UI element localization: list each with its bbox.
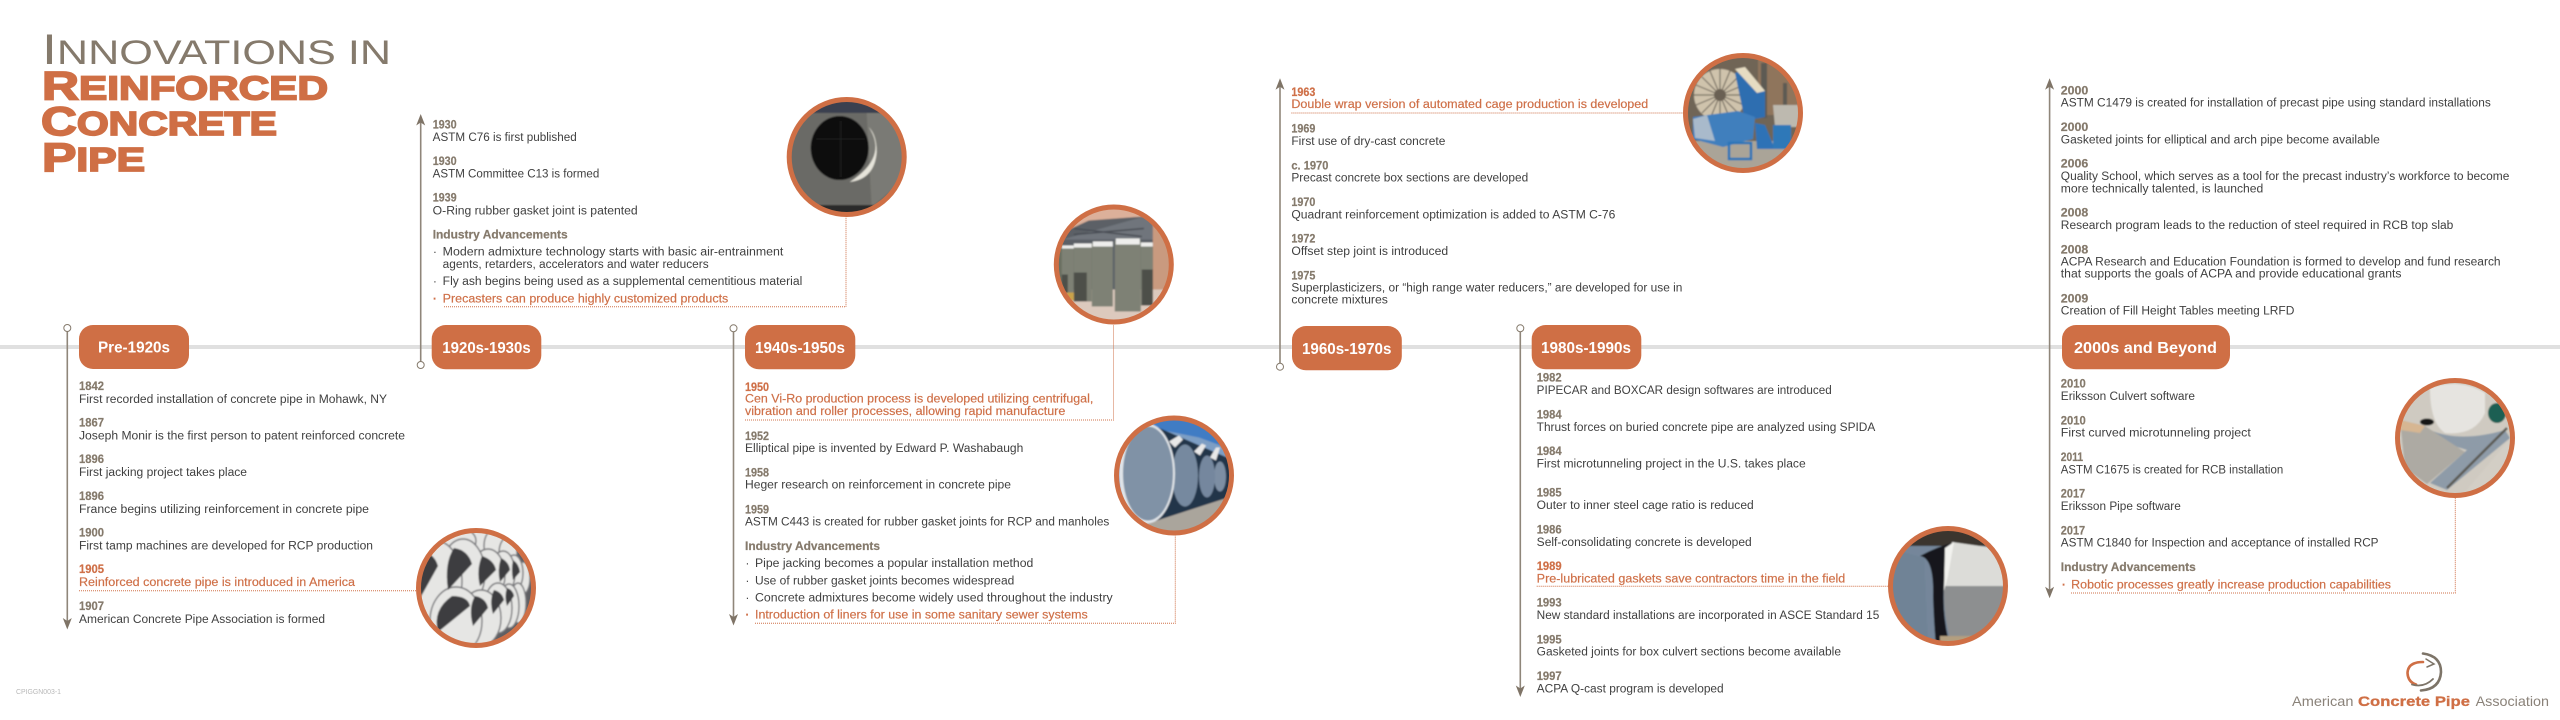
event 1984 SPIDA: Thrust forces on buried concrete pipe are analyzed using SPIDA [1537,422,1876,434]
event 1993 [1537,598,1879,622]
event 2009 [2061,293,2294,317]
arrow: Pre-1920s timeline [63,324,72,630]
event 2017 software [2061,489,2181,513]
event 1952: 1952 [745,431,769,443]
event 1930 C76 [433,120,577,144]
connector to photo [1291,112,1683,114]
event 1984 SPIDA [1537,410,1876,434]
industry advancements 2000s: Industry Advancements [2061,560,2196,574]
industry advancements 2000s [2061,560,2391,591]
event 1939: 1939 [433,193,457,205]
industry advancements 1940s-1950s: · [746,558,749,570]
industry advancements 1920s-1930s: Precasters can produce highly customized products [443,293,729,305]
event 2000 gasketed joints [2061,122,2380,146]
event 2010 curved microtunneling: First curved microtunneling project [2061,428,2252,440]
highlighted event 1950: 1950 [745,382,769,394]
event 1997: 1997 [1537,671,1562,683]
title [41,26,391,180]
event 1997: ACPA Q-cast program is developed [1537,683,1724,695]
connector to photo [745,324,1114,420]
connector to photo [755,535,1175,623]
event 1972: Offset step joint is introduced [1291,246,1448,258]
event 1984 microtunneling: First microtunneling project in the U.S. takes place [1537,458,1806,470]
event 2010 curved microtunneling: 2010 [2061,415,2086,427]
industry advancements 1940s-1950s: Industry Advancements [745,539,880,553]
highlighted event 1963: 1963 [1291,87,1315,99]
connector to photo [2071,498,2455,593]
panel: 1980s-1990s [1516,325,2008,697]
industry advancements 1920s-1930s: Modern admixture technology starts with basic air-entrainment [443,247,784,259]
event 1896 France: France begins utilizing reinforcement in concrete pipe [79,504,369,516]
arrow: 1920s-1930s timeline [416,114,425,368]
event 2000 C1479 [2061,85,2491,110]
event 1939: O-Ring rubber gasket joint is patented [433,205,638,217]
event 2010 Culvert: 2010 [2061,379,2086,391]
panel: 1940s-1950s [729,204,1234,626]
industry advancements 1940s-1950s: Concrete admixtures become widely used throughout the industry [755,593,1113,605]
arrow: 1940s-1950s timeline [729,325,738,626]
event 1993: New standard installations are incorporated in ASCE Standard 15 [1537,610,1879,622]
highlighted event 1989 [1537,561,1845,585]
panel: 1960s-1970s [1276,53,1803,370]
event c. 1970: Precast concrete box sections are developed [1291,173,1528,185]
event 1959: 1959 [745,504,769,516]
logo: American Concrete Pipe Association [2292,654,2549,709]
event 2006: 2006 [2061,159,2088,171]
emblem [2408,654,2441,690]
photo: automated cage machine [1683,53,1803,173]
event 2010 curved microtunneling [2061,415,2252,440]
event 1982 [1537,373,1832,397]
industry advancements 1920s-1930s: agents, retarders, accelerators and water reducers [443,259,709,271]
event 1986: Self-consolidating concrete is developed [1537,537,1752,549]
arrow: 2000s and Beyond timeline [2045,78,2054,598]
event 1930 C76: ASTM C76 is first published [433,132,577,144]
event 1896 jacking: 1896 [79,454,104,466]
event 1930 C76: 1930 [433,120,457,132]
era label: 1940s-1950s [745,325,855,369]
event 1896 France: 1896 [79,491,104,503]
panel: Pre-1920s [63,324,536,655]
title: CONCRETE [41,100,277,144]
event 2017 software: Eriksson Pipe software [2061,501,2181,513]
event 1969: 1969 [1291,124,1315,136]
event 1986 [1537,524,1752,549]
event 1995 [1537,634,1841,659]
event 2009: 2009 [2061,293,2088,305]
event 1867 [79,418,405,442]
event 1896 jacking [79,454,247,479]
event 2017 software: 2017 [2061,489,2085,501]
era label: 1920s-1930s: 1920s-1930s [442,340,531,357]
event 1985: Outer to inner steel cage ratio is reduced [1537,500,1754,512]
highlighted event 1950 [745,382,1093,418]
arrow: 1960s-1970s timeline [1276,78,1284,370]
industry advancements 2000s: Robotic processes greatly increase production capabilities [2071,579,2391,591]
era label: 1960s-1970s [1292,326,1402,370]
event 2010 Culvert [2061,379,2195,403]
title: PIPE [42,136,145,180]
industry advancements 1940s-1950s [745,539,1113,622]
highlighted event 1963 [1291,87,1648,111]
event 1985: 1985 [1537,488,1562,500]
industry advancements 1920s-1930s: · [433,276,437,288]
event 1970 [1291,197,1615,221]
event 2008 research program: 2008 [2061,208,2089,220]
highlighted event 1950: vibration and roller processes, allowing rapid manufacture [745,406,1065,418]
event 1959 [745,504,1110,528]
industry advancements 2000s: · [2062,579,2066,591]
title: INNOVATIONS IN [42,26,391,74]
event 1970: 1970 [1291,197,1315,209]
event 1975 [1291,270,1682,307]
era label: Pre-1920s: Pre-1920s [98,340,170,357]
title: REINFORCED [42,64,328,108]
panel: 2000s and Beyond [2045,78,2515,598]
event 1970: Quadrant reinforcement optimization is added to ASTM C-76 [1291,209,1615,221]
highlighted event 1963: Double wrap version of automated cage production is developed [1291,99,1648,111]
event 1958: Heger research on reinforcement in concrete pipe [745,480,1011,492]
connector to photo [1537,585,1888,587]
era label: 1980s-1990s [1532,325,1641,369]
event 2008 foundation: ACPA Research and Education Foundation is formed to develop and fund research [2061,257,2501,269]
document code: CPIGGN003-1 [16,689,61,696]
event 2017 C1840: ASTM C1840 for Inspection and acceptance of installed RCP [2061,538,2379,550]
highlighted event 1905 [79,564,356,589]
era label: Pre-1920s [79,325,189,369]
event 1867: Joseph Monir is the first person to patent reinforced concrete [79,430,405,442]
event 2008 research program: Research program leads to the reduction of steel required in RCB top slab [2061,220,2453,232]
era label: 1980s-1990s: 1980s-1990s [1541,340,1631,357]
industry advancements 1940s-1950s: · [746,610,749,622]
event 1896 France [79,491,369,516]
event 1995: 1995 [1537,634,1562,646]
industry advancements 1920s-1930s: · [433,247,437,259]
event 1958: 1958 [745,468,770,480]
era label: 1940s-1950s: 1940s-1950s [755,340,845,357]
era label: 2000s and Beyond: 2000s and Beyond [2074,340,2217,357]
industry advancements 1920s-1930s: Fly ash begins being used as a supplemental cementitious material [443,276,802,288]
event 2008 research program [2061,208,2453,232]
industry advancements 1940s-1950s: Introduction of liners for use in some sanitary sewer systems [755,610,1088,622]
event 1930 C13 [433,156,599,181]
event 2011: ASTM C1675 is created for RCB installation [2061,464,2283,476]
event 1842: First recorded installation of concrete pipe in Mohawk, NY [79,394,387,406]
event 1939 [433,193,638,217]
panel: 1920s-1930s [416,97,907,369]
connector to photo [79,590,416,592]
event 1867: 1867 [79,418,104,430]
event 1997 [1537,671,1724,695]
highlighted event 1950: Cen Vi-Ro production process is developed utilizing centrifugal, [745,394,1093,406]
photo: large lined pipes [1114,416,1234,536]
event 1958 [745,468,1011,492]
event 1900: 1900 [79,528,104,540]
industry advancements 1940s-1950s: · [746,575,749,587]
wordmark: American [2292,693,2354,709]
industry advancements 1940s-1950s: Use of rubber gasket joints becomes widespread [755,575,1014,587]
event 2008 foundation: 2008 [2061,244,2089,256]
event 1984 microtunneling [1537,446,1806,470]
event 1972 [1291,234,1448,258]
era label: 2000s and Beyond [2062,325,2230,369]
photo: precast junction structure [2395,378,2515,498]
wordmark: Association [2476,693,2549,709]
event 1982: PIPECAR and BOXCAR design softwares are introduced [1537,385,1832,397]
arrow: 1980s-1990s timeline [1516,325,1525,697]
highlighted event 1989: Pre-lubricated gaskets save contractors time in the field [1537,573,1845,585]
era label: 1960s-1970s: 1960s-1970s [1302,341,1391,358]
event 2006: more technically talented, is launched [2061,183,2263,195]
event 1907: 1907 [79,601,104,613]
event 1896 jacking: First jacking project takes place [79,467,247,479]
era label: 1920s-1930s [432,325,541,369]
event 2017 C1840: 2017 [2061,525,2085,537]
event 1975: 1975 [1291,270,1316,282]
event 2011: 2011 [2061,452,2084,464]
event 2000 C1479: 2000 [2061,85,2088,97]
event 1959: ASTM C443 is created for rubber gasket joints for RCP and manholes [745,516,1110,528]
event 2006 [2061,159,2509,195]
photo: stacked white pipes [416,528,536,648]
event 2017 C1840 [2061,525,2379,550]
photo: pipe with pre-lubricated gasket [1888,526,2008,646]
event 1975: Superplasticizers, or “high range water reducers,” are developed for use in [1291,283,1682,295]
photo: pipe section with round opening [787,97,907,217]
event 2000 C1479: ASTM C1479 is created for installation of precast pipe using standard installations [2061,98,2491,110]
event 1842: 1842 [79,381,104,393]
industry advancements 1940s-1950s: Pipe jacking becomes a popular installation method [755,558,1033,570]
event 1952 [745,431,1023,455]
industry advancements 1940s-1950s: · [746,593,749,605]
event 1907 [79,601,325,626]
event 1952: Elliptical pipe is invented by Edward P. Washabaugh [745,443,1023,455]
connector to photo [444,217,846,307]
event 1969 [1291,124,1445,148]
event 2008 foundation: that supports the goals of ACPA and provide educational grants [2061,269,2402,281]
event 2010 Culvert: Eriksson Culvert software [2061,391,2195,403]
event 1900: First tamp machines are developed for RCP production [79,540,373,552]
event 1993: 1993 [1537,598,1562,610]
industry advancements 1920s-1930s: Industry Advancements [433,227,568,241]
event 1984 SPIDA: 1984 [1537,410,1562,422]
event 1969: First use of dry-cast concrete [1291,136,1445,148]
event 1900 [79,528,373,552]
event 1984 microtunneling: 1984 [1537,446,1562,458]
event 1982: 1982 [1537,373,1562,385]
event 2006: Quality School, which serves as a tool for the precast industry’s workforce to become [2061,171,2509,183]
event 1972: 1972 [1291,234,1315,246]
photo: standing concrete pipes [1054,204,1174,324]
wordmark: Concrete Pipe [2358,693,2470,709]
highlighted event 1905: Reinforced concrete pipe is introduced in America [79,577,356,589]
event 1842 [79,381,387,406]
event 1975: concrete mixtures [1291,295,1388,307]
event 1995: Gasketed joints for box culvert sections become available [1537,647,1841,659]
event c. 1970: c. 1970 [1291,160,1328,172]
highlighted event 1989: 1989 [1537,561,1562,573]
event 2000 gasketed joints: Gasketed joints for elliptical and arch pipe become available [2061,134,2380,146]
event 2011 [2061,452,2283,476]
wordmark [2292,693,2549,709]
event 1930 C13: 1930 [433,156,457,168]
event c. 1970 [1291,160,1528,185]
event 1986: 1986 [1537,524,1562,536]
event 2008 foundation [2061,244,2501,281]
highlighted event 1905: 1905 [79,564,105,576]
event 1907: American Concrete Pipe Association is formed [79,614,325,626]
event 2000 gasketed joints: 2000 [2061,122,2088,134]
industry advancements 1920s-1930s [433,227,802,305]
event 1930 C13: ASTM Committee C13 is formed [433,169,599,181]
event 2009: Creation of Fill Height Tables meeting LRFD [2061,305,2294,317]
industry advancements 1920s-1930s: · [433,293,437,305]
event 1985 [1537,488,1754,512]
